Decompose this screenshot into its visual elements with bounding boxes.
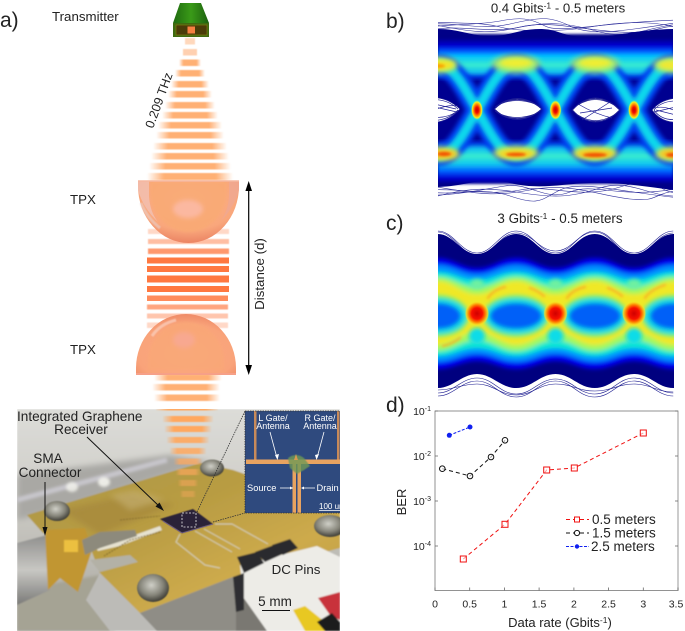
label: integrated graphene receiver: Receiver (54, 422, 108, 437)
label: SMA connector: Connector (19, 465, 82, 480)
label: SMA connector (19, 451, 82, 480)
label: upper TPX: TPX (70, 192, 96, 207)
inset: micrograph of device (245, 411, 346, 513)
title b: -1 (544, 0, 551, 10)
arrow: to SMA connector (42, 482, 48, 536)
crossing hot spots (471, 100, 640, 120)
title b: - 0.5 meters (551, 0, 626, 16)
y axis tick labels: -1 (425, 406, 431, 413)
panel label c: c) (386, 212, 404, 235)
x axis tick labels: 3 (640, 598, 646, 610)
eye centres (438, 276, 674, 344)
crossing hot spots (465, 301, 646, 326)
plot frame (435, 411, 678, 590)
legend: 2.5 meters (591, 539, 655, 554)
x axis tick labels: 2.5 (601, 598, 616, 610)
label: integrated graphene receiver: Integrated Graphene (17, 409, 142, 424)
label: integrated graphene receiver (17, 409, 142, 437)
y axis tick labels: -4 (425, 541, 431, 548)
icon: transmitter horn (173, 3, 209, 37)
beam: wave fronts above the receiver (156, 404, 218, 497)
inset: micrograph of device: 100 um (319, 502, 346, 511)
legend: 1.5 meters (592, 526, 656, 540)
x axis tick labels: 0.5 (462, 598, 477, 610)
rail highlights (418, 55, 685, 161)
scale bar: 5 mm (258, 594, 292, 609)
graphene chip (160, 509, 213, 533)
legend (566, 512, 656, 554)
y axis tick labels: -3 (425, 496, 431, 503)
x axis tick labels: 2 (571, 598, 577, 610)
arrow: to receiver (87, 437, 164, 511)
x axis tick labels (432, 598, 683, 610)
inset: micrograph of device: Antenna (303, 421, 337, 431)
label: distance: Distance (d) (252, 238, 267, 310)
series: 2.5 meters (447, 424, 472, 438)
lens: upper TPX (138, 181, 239, 243)
label: transmitter: Transmitter (52, 9, 119, 24)
panel label a: a) (0, 9, 19, 32)
title c: - 0.5 meters (547, 211, 623, 226)
zoom guide lines (197, 411, 340, 522)
panel: receiver photograph (17, 404, 346, 631)
label: DC pins: DC Pins (272, 562, 321, 577)
y axis tick labels: 10 (413, 496, 425, 508)
outer trace noise (430, 19, 680, 201)
icon: screws (44, 460, 346, 602)
label: lower TPX: TPX (70, 342, 96, 357)
y axis tick labels: -2 (425, 451, 431, 458)
beam: upper terahertz wave fronts (147, 38, 233, 180)
panel label b: b) (386, 10, 405, 33)
inset: micrograph of device: R Gate/ (304, 413, 336, 423)
y axis tick labels: 10 (413, 406, 425, 418)
beam: collimated wave fronts between lenses (147, 229, 229, 328)
label: SMA connector: SMA (33, 451, 64, 466)
x axis title: -1 (600, 615, 608, 625)
chart: eye diagram 3 Gbit (438, 230, 674, 398)
title c: -1 (540, 211, 548, 221)
series: 1.5 meters (440, 438, 508, 479)
inset: micrograph of device: Source (247, 483, 276, 493)
inset: micrograph of device: Antenna (256, 421, 290, 431)
x axis tick labels: 1.5 (532, 598, 547, 610)
orange streaks (443, 285, 665, 346)
lens: lower TPX (136, 314, 236, 375)
y axis title: BER (394, 489, 409, 515)
inset: micrograph of device: L Gate/ (258, 413, 288, 423)
panel label d: d) (386, 394, 405, 417)
chart: bit error rate vs data rate (394, 406, 683, 630)
x axis tick labels: 1 (501, 598, 507, 610)
y axis tick labels (413, 406, 431, 553)
intensity bands (438, 234, 674, 388)
beam: wave fronts below lower lens (152, 374, 222, 401)
eye openings (430, 98, 680, 122)
x axis title: ) (607, 615, 612, 630)
eye traces (359, 64, 685, 156)
title b: 0.4 Gbits (491, 0, 544, 16)
inset: micrograph of device: Drain (316, 483, 339, 493)
chart: eye diagram 0.4 Gbit (438, 18, 673, 202)
x axis title: Data rate (Gbits (508, 615, 600, 630)
label: frequency: 0.209 THz (143, 71, 176, 130)
y axis tick labels: 10 (413, 451, 425, 463)
legend: 0.5 meters (592, 512, 656, 527)
series: 0.5 meters (460, 430, 646, 562)
title c: 3 Gbits (497, 211, 540, 226)
x axis tick labels: 0 (432, 598, 438, 610)
arrow: distance (245, 181, 252, 375)
x axis tick labels: 3.5 (669, 598, 683, 610)
y axis tick labels: 10 (413, 541, 425, 553)
